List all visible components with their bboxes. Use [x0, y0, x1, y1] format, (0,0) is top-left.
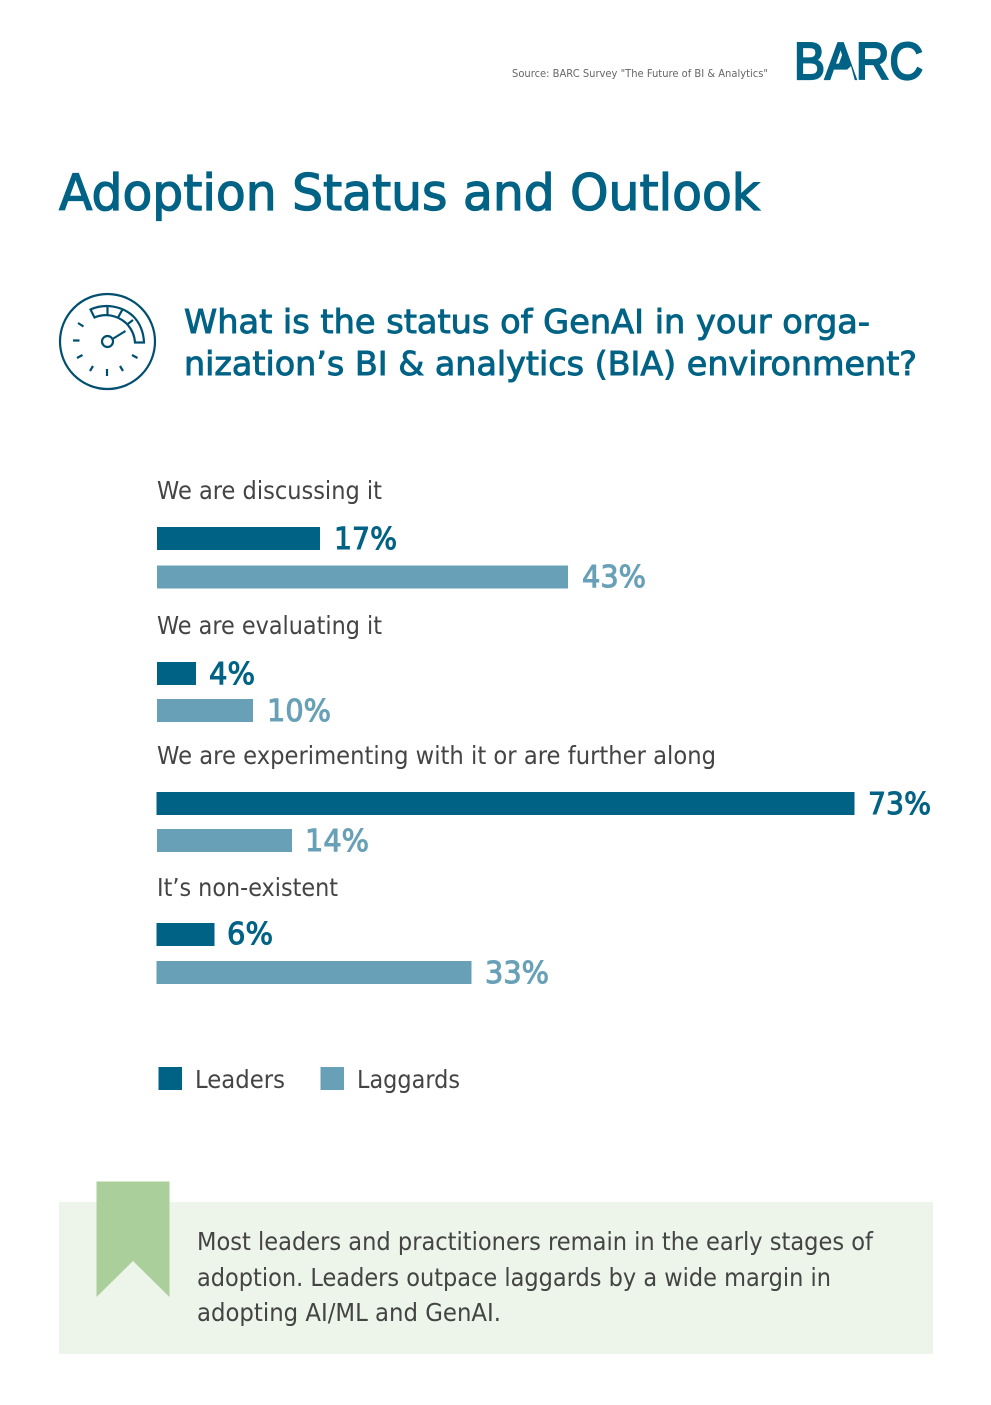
- title: Adoption Status and Outlook: [59, 164, 760, 222]
- logo: BARC: BARC: [794, 33, 923, 91]
- group: We are discussing it: 43%: [582, 560, 646, 595]
- group: We are discussing it: [157, 476, 646, 595]
- group: We are experimenting with it or are further along: [156, 741, 931, 859]
- icon: green bookmark ribbon: [96, 1182, 170, 1297]
- question heading: [184, 302, 917, 383]
- legend: Laggards: [357, 1065, 460, 1094]
- group: It's non-existent: 6%: [227, 917, 273, 952]
- group: It's non-existent: 33%: [485, 956, 549, 991]
- group: We are evaluating it: 10%: [267, 694, 331, 729]
- legend: Leaders: [195, 1065, 285, 1094]
- group: We are experimenting with it or are further along: We are experimenting with it or are further along: [157, 741, 716, 770]
- callout panel: [59, 1182, 933, 1354]
- group: It's non-existent: [156, 873, 549, 991]
- question heading: What is the status of GenAI in your orga-: [184, 302, 870, 341]
- callout text: Most leaders and practitioners remain in the early stages of: [197, 1227, 874, 1256]
- callout text: adopting AI/ML and GenAI.: [197, 1298, 501, 1327]
- icon: speedometer gauge: [60, 294, 155, 389]
- callout text: [197, 1227, 874, 1327]
- group: We are discussing it: We are discussing it: [157, 476, 382, 505]
- group: It's non-existent: It’s non-existent: [157, 873, 338, 902]
- bar chart: [156, 476, 931, 991]
- source note: Source: BARC Survey "The Future of BI & Analytics": [512, 67, 768, 80]
- group: We are evaluating it: We are evaluating it: [157, 611, 382, 640]
- group: We are discussing it: 17%: [334, 522, 397, 557]
- callout text: adoption. Leaders outpace laggards by a wide margin in: [197, 1263, 831, 1292]
- group: We are experimenting with it or are further along: 73%: [868, 787, 931, 822]
- group: We are evaluating it: [157, 611, 382, 729]
- group: We are evaluating it: 4%: [209, 657, 255, 692]
- legend: [158, 1065, 460, 1094]
- question heading: nization’s BI & analytics (BIA) environment?: [184, 344, 917, 383]
- group: We are experimenting with it or are further along: 14%: [305, 824, 369, 859]
